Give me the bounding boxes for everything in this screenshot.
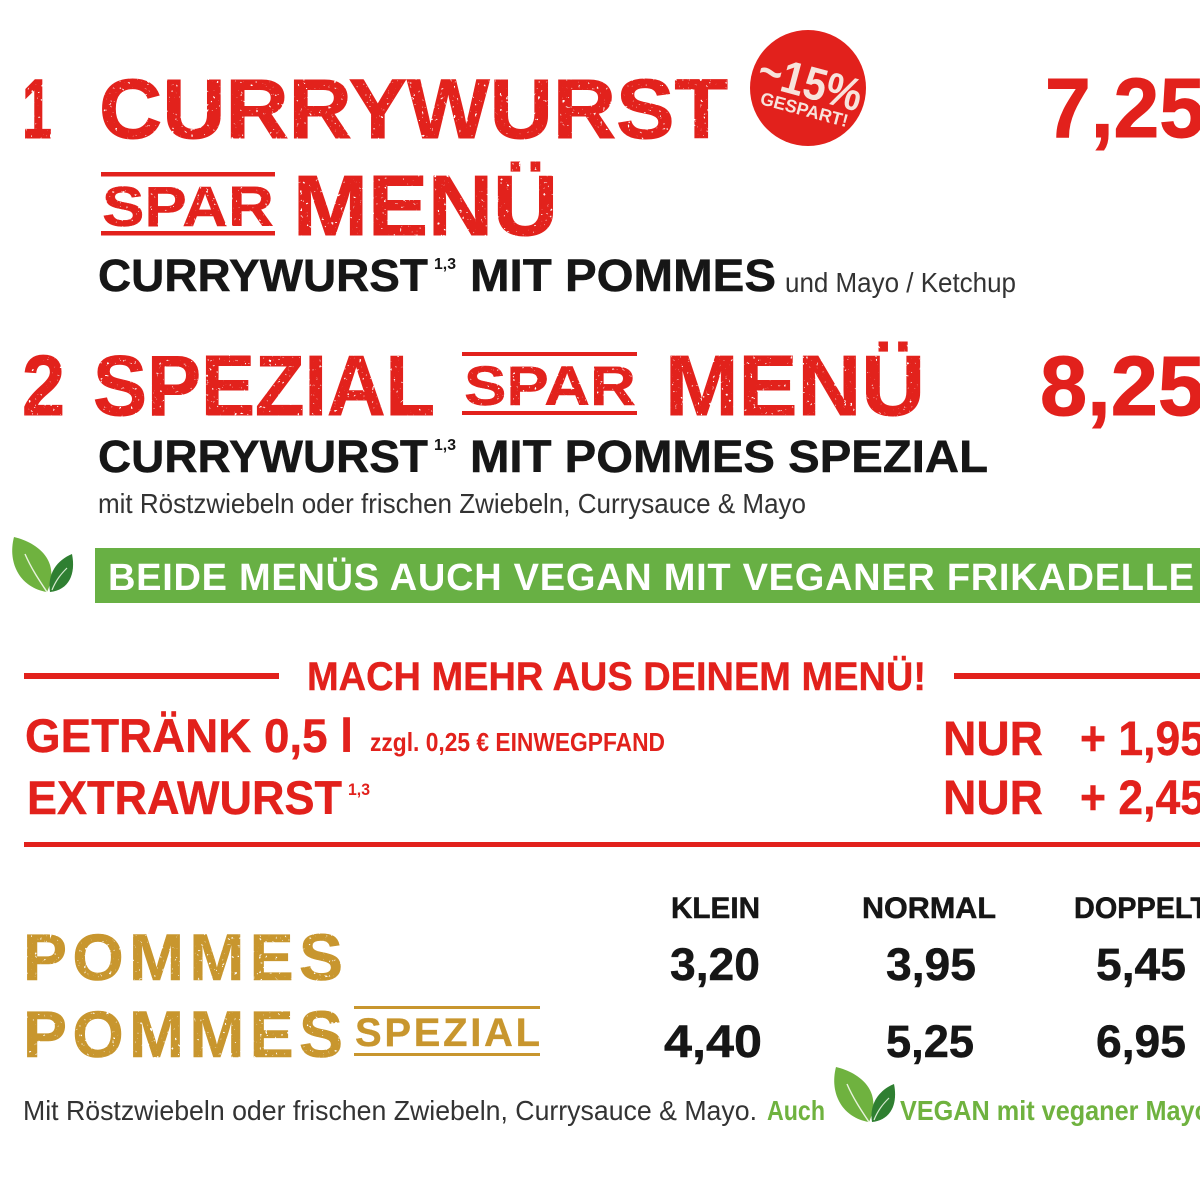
fries special prices: 5,25 <box>886 1016 974 1067</box>
fries prices <box>670 939 1186 990</box>
fries prices: 3,95 <box>886 939 976 990</box>
title spezial: SPEZIAL <box>93 339 435 434</box>
upsell: drink: GETRÄNK 0,5 l <box>25 709 353 762</box>
title currywurst: CURRYWURST <box>99 62 728 156</box>
footnote: Auch <box>767 1095 825 1126</box>
menu 1 description: MIT POMMES <box>470 250 776 301</box>
menu 2 description <box>98 431 988 519</box>
fries special prices <box>664 1016 1186 1067</box>
title menu: MENÜ <box>293 159 558 254</box>
fries special prices: 6,95 <box>1096 1016 1186 1067</box>
spar rules <box>101 172 275 236</box>
menu 1 description: und Mayo / Ketchup <box>785 267 1016 298</box>
menu 1 description: CURRYWURST <box>98 250 428 301</box>
footnote: Mit Röstzwiebeln oder frischen Zwiebeln, Currysauce & Mayo. <box>23 1095 757 1126</box>
number 1: 1 <box>22 62 52 156</box>
menu 2 description: CURRYWURST <box>98 431 428 482</box>
fries special title: POMMES <box>23 997 343 1071</box>
fries special title <box>23 997 540 1071</box>
footnote <box>23 1095 1200 1126</box>
badge text: ~15% <box>753 44 868 121</box>
menu 2 heading <box>22 339 925 434</box>
upsell: extra sausage: 1,3 <box>348 780 370 799</box>
upsell: drink <box>25 709 1200 766</box>
fries special prices: 4,40 <box>664 1016 762 1067</box>
upsell: extra sausage <box>27 771 1200 825</box>
fries price table headers <box>671 892 1200 925</box>
number 2: 2 <box>22 339 65 434</box>
upsell: extra sausage: EXTRAWURST <box>27 771 342 824</box>
spar label: SPAR <box>464 354 636 417</box>
upsell: drink: zzgl. 0,25 € EINWEGPFAND <box>370 727 665 757</box>
menu 2 description: MIT POMMES SPEZIAL <box>470 431 988 482</box>
fries prices: 3,20 <box>670 939 760 990</box>
menu 2 description: mit Röstzwiebeln oder frischen Zwiebeln, Currysauce & Mayo <box>98 488 806 519</box>
menu 1 description <box>98 250 1016 301</box>
fries title: POMMES <box>23 920 343 994</box>
icon: vegan leaves small <box>834 1067 895 1122</box>
fries price table headers: NORMAL <box>862 892 996 925</box>
badge text: GESPART! <box>758 88 850 131</box>
spar label: SPAR <box>102 175 274 239</box>
title menu: MENÜ <box>665 339 925 434</box>
upsell: extra sausage: NUR <box>943 772 1043 825</box>
upsell heading: MACH MEHR AUS DEINEM MENÜ! <box>307 654 926 699</box>
menu 1 heading <box>22 62 728 254</box>
vegan banner: BEIDE MENÜS AUCH VEGAN MIT VEGANER FRIKADELLE <box>108 556 1194 599</box>
fries prices: 5,45 <box>1096 939 1186 990</box>
spar rules <box>462 352 637 415</box>
badge: 15 percent saved <box>749 30 868 146</box>
upsell: drink: NUR <box>943 713 1043 766</box>
fries special title: SPEZIAL <box>355 1011 540 1055</box>
upsell heading <box>24 654 1200 699</box>
icon: vegan leaves <box>12 537 73 592</box>
fries price table headers: KLEIN <box>671 892 760 925</box>
menu 1 description: 1,3 <box>434 256 456 273</box>
price 2: 8,25 <box>1040 339 1200 433</box>
menu 2 description: 1,3 <box>434 437 456 454</box>
